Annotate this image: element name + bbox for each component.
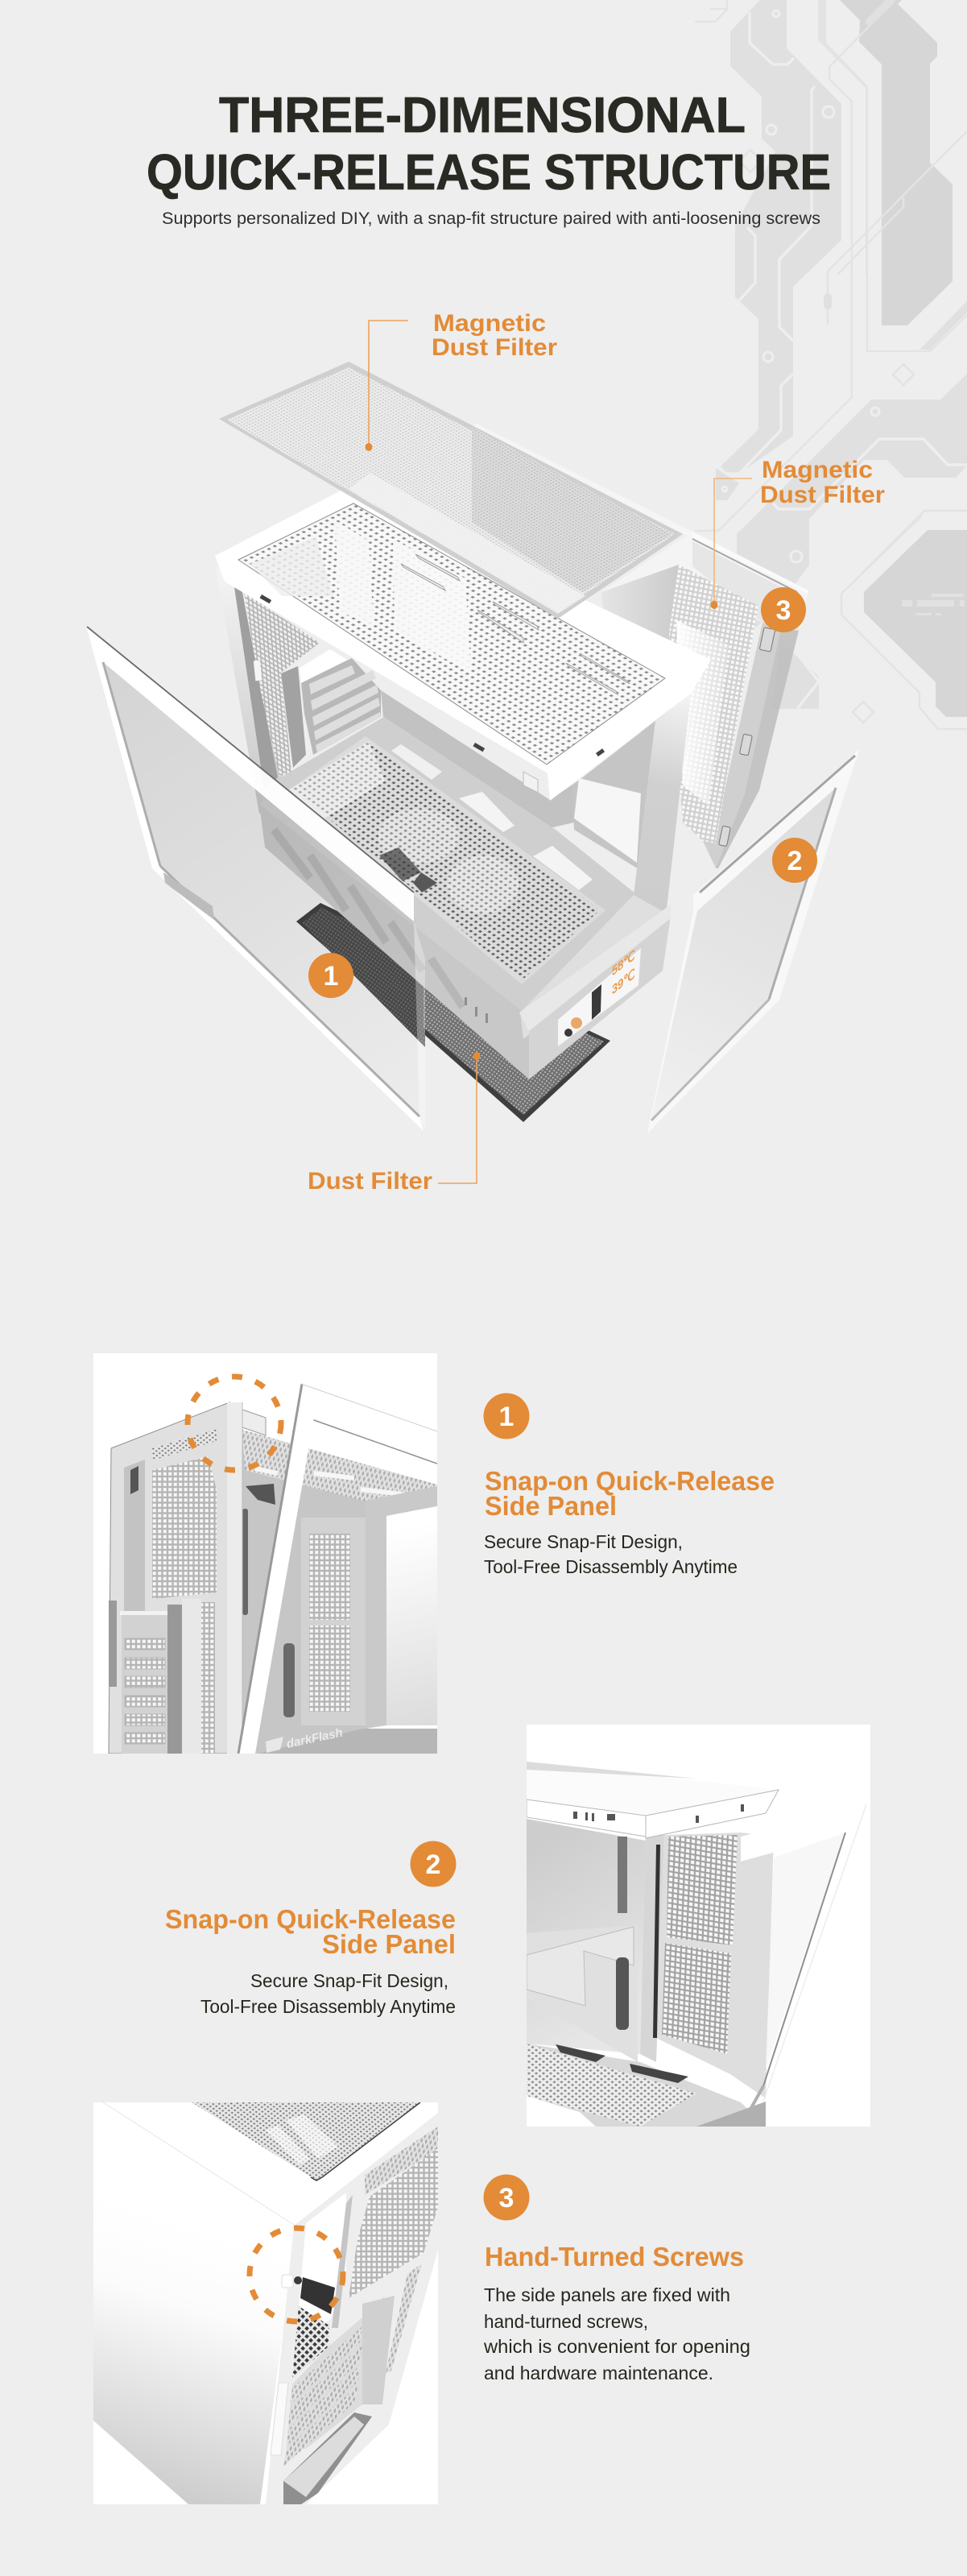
text block 2: 2 [426,1849,440,1880]
number badge 2: 2 [787,846,802,876]
number badge 3 [761,587,806,632]
LCD display: 39℃ [612,966,635,998]
text block 1: Secure Snap-Fit Design, [484,1531,683,1552]
callout: magnetic dust filter top: Dust Filter [432,334,557,361]
windows behind front pillar [572,721,655,874]
photo panel 1: snap-on side panel close-up [93,1353,437,1754]
text block 3: hand-turned screws, [484,2311,648,2332]
text block 1: Tool-Free Disassembly Anytime [484,1556,738,1577]
text block 3: which is convenient for opening [483,2336,750,2357]
title: QUICK-RELEASE STRUCTURE [147,145,831,201]
text block 2: Side Panel [322,1929,456,1959]
callout: magnetic dust filter top [366,310,557,451]
rear mesh side panel [601,532,808,868]
exploded case diagram [86,362,860,1133]
callout: magnetic dust filter side [710,457,885,609]
text block 1: 1 [499,1402,514,1432]
text block 2 [165,1841,456,2017]
main chassis [215,487,711,1079]
callout: magnetic dust filter side: Magnetic [762,457,873,483]
callout: bottom dust filter [308,1052,480,1195]
top magnetic dust filter [219,362,692,619]
number badge 1 [308,953,353,998]
LCD display: 58℃ [612,947,635,979]
text block 1: Side Panel [485,1491,617,1521]
number badge 1: 1 [324,961,338,992]
text block 1 [483,1394,775,1577]
top frame [215,487,711,801]
title: THREE-DIMENSIONAL [219,88,746,143]
bottom dust filter [296,903,610,1122]
callout: bottom dust filter: Dust Filter [308,1168,432,1195]
text block 1: Snap-on Quick-Release [485,1466,775,1496]
text block 3 [483,2175,750,2383]
photo panel 1: snap-on side panel close-up: darkFlash [285,1726,344,1751]
text block 3: 3 [499,2183,514,2214]
left side panel (1) [86,626,425,1131]
text block 2: Tool-Free Disassembly Anytime [200,1996,456,2017]
front pillar [634,694,691,916]
number badge 2 [772,838,817,883]
photo panel 3: hand-turned screws close-up [93,2102,438,2504]
text block 2: Snap-on Quick-Release [165,1904,456,1934]
number badge 3: 3 [776,595,791,626]
LCD display [558,947,641,1046]
PCI slots [301,658,381,755]
text block 3: and hardware maintenance. [484,2363,713,2383]
motherboard tray back wall [381,690,580,829]
text block 3: The side panels are fixed with [484,2284,730,2305]
title [147,88,831,201]
callout: magnetic dust filter top: Magnetic [433,310,546,337]
text block 3: Hand-Turned Screws [485,2242,744,2272]
photo panel 2: side panel close-up [527,1725,870,2127]
circuit background pattern [695,0,967,729]
PSU shroud mesh [288,736,605,984]
subtitle: Supports personalized DIY, with a snap-fit structure paired with anti-loosening screws [162,209,820,228]
base [259,804,529,1079]
rear wall and pillar [215,564,283,814]
callout: magnetic dust filter side: Dust Filter [760,482,885,508]
right side panel (2) [647,749,860,1133]
text block 2: Secure Snap-Fit Design, [250,1970,448,1991]
